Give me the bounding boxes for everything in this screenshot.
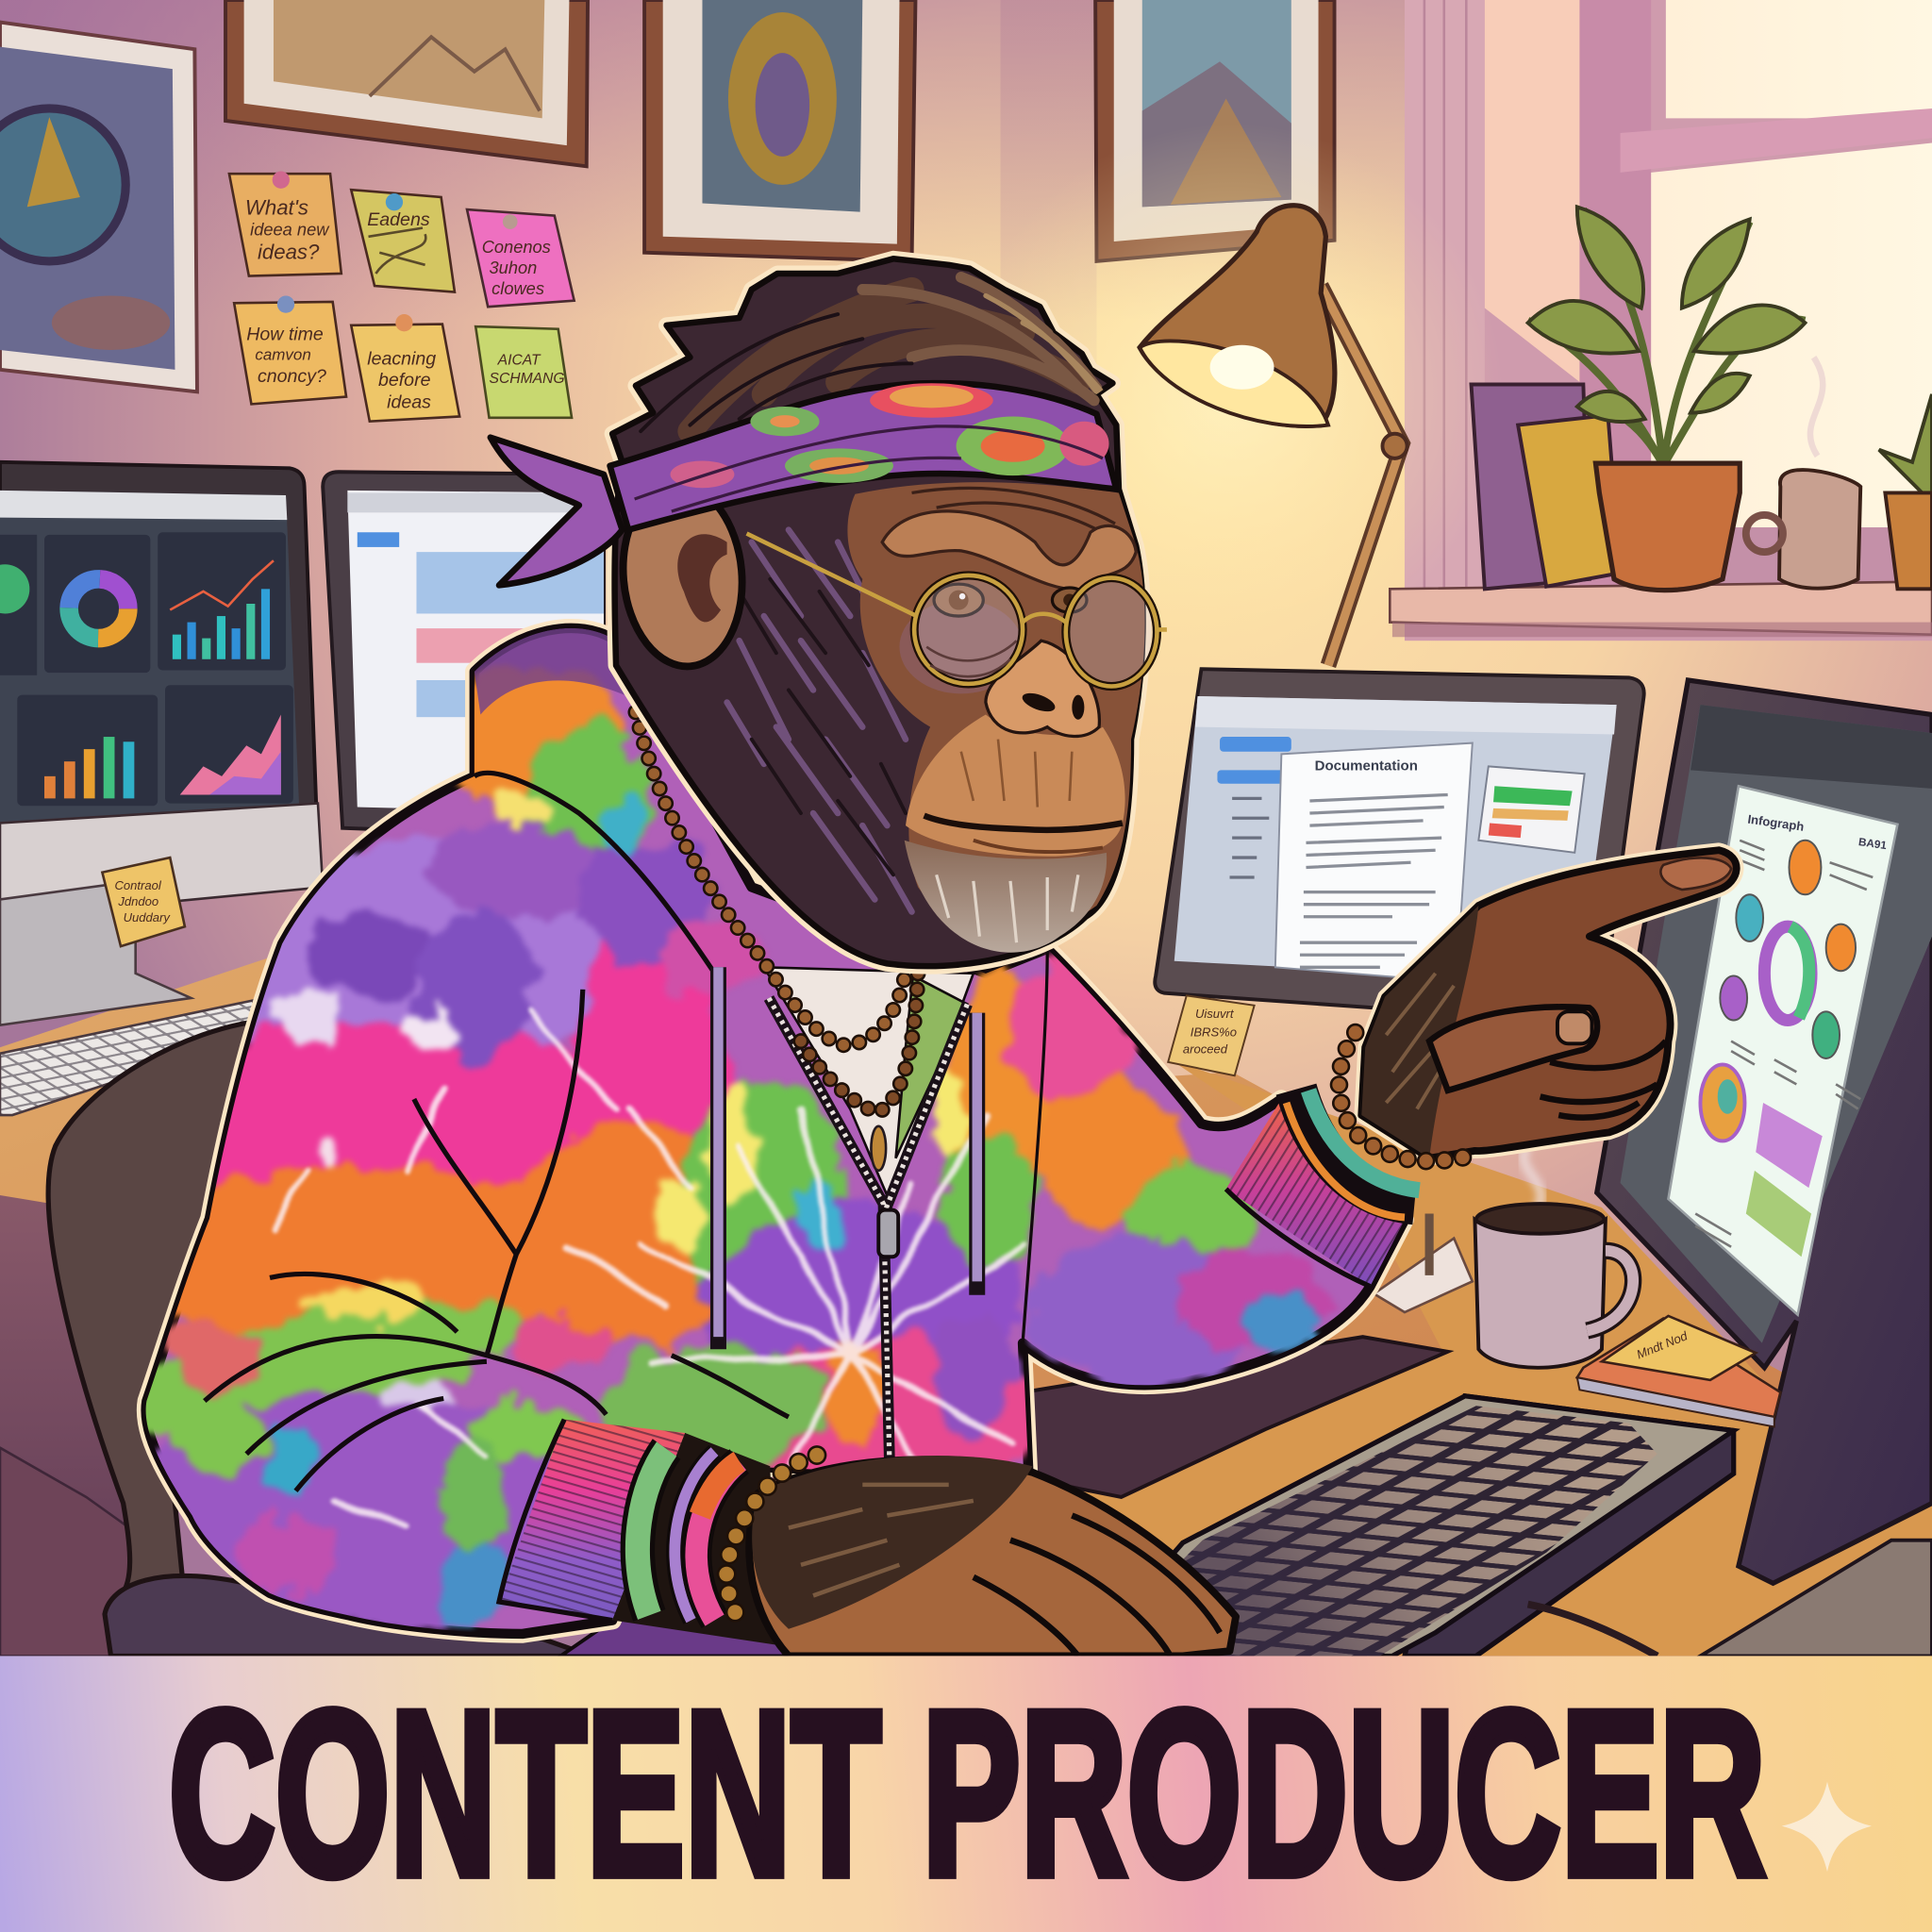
hair strands <box>641 277 1109 431</box>
main keyboard <box>1084 1396 1734 1656</box>
sticky note 3: clowes <box>491 278 544 298</box>
fingernail <box>1660 858 1731 890</box>
paper under hand <box>1374 1239 1473 1312</box>
bead bracelet <box>726 1456 817 1629</box>
steaming cup <box>1746 358 1860 589</box>
banner background <box>0 1656 1932 1932</box>
sticky note 1: What's <box>245 195 308 219</box>
sticky notes wall <box>229 172 575 422</box>
hoodie strings <box>718 967 977 1349</box>
nose <box>986 641 1099 737</box>
left sleeve cuff <box>499 1420 685 1621</box>
potted plant <box>1528 207 1805 591</box>
coffee mug <box>1474 1146 1633 1368</box>
sticky note 4: camvon <box>255 345 311 363</box>
muzzle wrinkles <box>961 740 1072 808</box>
windowsill <box>1390 581 1932 637</box>
area chart <box>180 715 281 794</box>
pendant <box>871 1126 886 1171</box>
headband <box>491 383 1116 585</box>
lower left wall <box>0 1195 127 1657</box>
sticky note 6 <box>475 326 572 418</box>
documentation heading: Documentation <box>1315 758 1418 774</box>
tie-dye hoodie <box>92 628 1405 1634</box>
bar chart top <box>170 560 274 659</box>
left monitor sticky note: Uuddary <box>124 910 171 924</box>
neck fur <box>641 555 1047 974</box>
sticky note 1: ideea new <box>250 219 330 239</box>
sticky note 4 <box>234 295 346 404</box>
window <box>1405 0 1932 641</box>
right monitor <box>1597 680 1932 1583</box>
sticky note 3 <box>467 209 575 307</box>
info card purple <box>1756 1103 1823 1188</box>
left panel pie <box>0 564 29 613</box>
center monitor sticky note <box>1168 995 1255 1075</box>
picture frame 2 <box>225 0 588 166</box>
info card green <box>1746 1171 1811 1257</box>
face skin <box>847 482 1144 934</box>
sticky note 4: How time <box>246 324 324 344</box>
chin beard <box>905 841 1107 953</box>
wrist dark <box>612 1433 776 1645</box>
t-shirt and hoodie lining <box>764 967 974 1201</box>
thumb <box>1429 1007 1597 1091</box>
folded fingers <box>1541 1041 1666 1118</box>
sticky note 2: Eadens <box>367 209 430 230</box>
chin fur strokes <box>937 874 1078 942</box>
books <box>1472 385 1621 589</box>
left monitor sticky note: Jdndoo <box>117 894 158 908</box>
cheek fur strands <box>727 530 912 912</box>
eyes <box>934 584 983 616</box>
left keyboard <box>0 1001 265 1115</box>
color wheel <box>1700 1064 1744 1141</box>
desk chair <box>48 1020 591 1656</box>
bar chart bottom <box>44 737 134 798</box>
tassel <box>1426 1214 1433 1275</box>
monitor base <box>1700 1541 1932 1656</box>
broad colour bands <box>209 844 628 1078</box>
monitor base cable <box>1528 1605 1657 1656</box>
wrist bracelets <box>1287 1090 1420 1217</box>
center monitor sticky note: IBRS%o <box>1191 1024 1237 1039</box>
central ring <box>1764 926 1811 1020</box>
sticky note 4: cnoncy? <box>258 366 326 387</box>
head <box>612 258 1167 966</box>
sticky note 5: before <box>378 370 431 391</box>
sticky note 1 <box>229 172 341 276</box>
zipper <box>769 998 967 1466</box>
ape figure <box>92 258 1737 1656</box>
sticky note 3: 3uhon <box>490 258 537 277</box>
white dye streaks <box>277 1010 1023 1528</box>
second monitor <box>323 472 604 893</box>
left monitor sticky note: Contraol <box>114 878 162 892</box>
desk <box>0 949 1932 1656</box>
picture frame 1 <box>0 23 197 391</box>
desk notebook <box>1577 1316 1780 1426</box>
center monitor documentation <box>1155 669 1644 1024</box>
muzzle <box>906 715 1125 857</box>
resting hand arm <box>612 1433 1236 1656</box>
ear <box>616 479 749 672</box>
round glasses <box>914 575 1157 687</box>
sticky note 3: Conenos <box>482 237 551 257</box>
pointing hand arm <box>1287 850 1737 1275</box>
lamp <box>1094 151 1468 668</box>
wall corner shade <box>1000 0 1096 340</box>
sticky note 2 <box>351 190 455 292</box>
finger lines <box>974 1516 1220 1656</box>
desk notebook: Mndt Nod <box>1635 1328 1690 1361</box>
head silhouette <box>612 258 1143 966</box>
right sleeve cuff <box>1226 1099 1405 1287</box>
donut chart <box>69 579 128 639</box>
title banner <box>0 1656 1932 1932</box>
infographic canvas: BA91 <box>1857 836 1888 852</box>
sticky note 1: ideas? <box>258 240 320 263</box>
center monitor sticky note: aroceed <box>1183 1042 1228 1057</box>
hand <box>1361 850 1737 1158</box>
sticky note 6: AICAT <box>497 353 541 369</box>
wrist fur <box>1361 906 1478 1158</box>
picture frame 4 <box>1095 0 1335 261</box>
hand <box>749 1459 1236 1656</box>
infographic canvas <box>1668 786 1897 1315</box>
eye socket <box>899 600 1023 693</box>
sticky note 5: ideas <box>387 391 431 412</box>
plant right <box>1879 394 1932 589</box>
left monitor sticky note <box>102 858 185 946</box>
colour details <box>308 910 431 999</box>
left monitor with dashboard <box>0 462 323 918</box>
bead bracelet <box>1339 1033 1470 1161</box>
body hem under wrist <box>560 1466 789 1656</box>
infographic canvas: Infograph <box>1747 812 1805 834</box>
sparkle <box>1782 1782 1872 1872</box>
hood lining shade <box>475 628 641 715</box>
sticky note 5: leacning <box>367 349 436 370</box>
hoodie fold lines <box>205 773 789 1491</box>
picture frame 3 <box>644 0 915 261</box>
headband folds <box>635 426 1103 511</box>
center monitor sticky note: Uisuvrt <box>1195 1007 1235 1021</box>
brow ridge <box>882 511 1136 590</box>
sticky note 6: SCHMANG <box>490 371 565 387</box>
mouth <box>924 816 1123 830</box>
headband patterns <box>671 383 1109 488</box>
bead necklace <box>636 712 918 1112</box>
lens wrinkles <box>926 641 1017 676</box>
forehead wrinkles <box>912 488 1115 536</box>
left bracelets <box>638 1449 740 1621</box>
doc side widget <box>1478 766 1585 853</box>
hand fur <box>752 1456 1033 1629</box>
left monitor stand <box>0 881 191 1025</box>
sticky note 5 <box>351 314 459 422</box>
